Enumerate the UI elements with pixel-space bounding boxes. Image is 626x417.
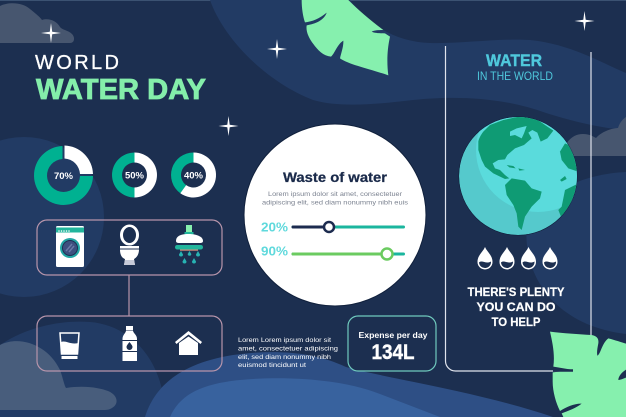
background blob: lower left bbox=[0, 322, 165, 417]
panel frame: water in the world bbox=[446, 46, 591, 371]
title line: WATER DAY: WATER DAY bbox=[36, 74, 206, 106]
cloud: top left bbox=[0, 3, 74, 43]
icon box: bottom bbox=[37, 316, 222, 371]
land: africa north bbox=[560, 144, 577, 171]
star 3 bbox=[218, 116, 238, 136]
text block: lorem ipsum bbox=[238, 337, 338, 369]
icon: house bbox=[175, 331, 202, 355]
text block: lorem ipsum: amet, consectetuer adipiscing bbox=[238, 346, 338, 352]
hudson bay bbox=[510, 126, 527, 138]
text block: lorem ipsum: euismod tincidunt ut bbox=[238, 362, 306, 369]
icons: water drops bbox=[478, 247, 558, 270]
text block: there's plenty you can do to help bbox=[468, 285, 564, 329]
title line: WORLD: WORLD bbox=[35, 52, 119, 74]
callout: expense per day: 134L bbox=[372, 341, 415, 364]
icon box: top bbox=[37, 220, 222, 275]
background wave: top band bbox=[210, 0, 626, 130]
heading: waste of water: Waste of water bbox=[283, 169, 388, 185]
slider: 20% bbox=[261, 220, 404, 234]
slider: 20%: 20% bbox=[261, 220, 288, 234]
background blob: right bbox=[526, 172, 626, 334]
text block: there's plenty you can do to help: YOU CAN DO bbox=[476, 300, 556, 314]
land: islands bbox=[507, 165, 567, 182]
background wave: bottom inner bbox=[170, 378, 440, 417]
slider: 90%: 90% bbox=[261, 244, 288, 258]
heading: water in the world bbox=[477, 51, 553, 83]
land: south america bbox=[505, 178, 542, 230]
body text: adipiscing elit, sed diam nonummy nibh euis bbox=[262, 200, 409, 206]
background blob: left circle bbox=[0, 137, 104, 297]
text block: there's plenty you can do to help: THERE'S PLENTY bbox=[468, 285, 564, 299]
panel: waste of water bbox=[244, 124, 426, 306]
leaf: top bbox=[302, 0, 390, 75]
icon: shower head bbox=[175, 225, 203, 264]
donut chart: 40% bbox=[171, 152, 216, 197]
slider: 90% bbox=[261, 244, 404, 260]
cloud: bottom left bbox=[0, 341, 117, 410]
heading: water in the world: WATER bbox=[486, 51, 542, 70]
star 1 bbox=[41, 23, 61, 43]
icon: toilet bbox=[120, 224, 140, 265]
icon: washing machine bbox=[56, 226, 84, 267]
body text bbox=[262, 191, 409, 206]
star 2 bbox=[267, 39, 287, 59]
text block: lorem ipsum: elit, sed diam nonummy nibh bbox=[238, 354, 331, 361]
globe bbox=[458, 116, 578, 236]
icon: glass of water bbox=[60, 333, 79, 359]
land: africa south bbox=[558, 184, 576, 216]
icon: water bottle bbox=[122, 326, 137, 361]
body text: Lorem ipsum dolor sit amet, consectetuer bbox=[268, 191, 403, 198]
donut chart: 70%: 70% bbox=[54, 171, 74, 182]
donut chart: 40%: 40% bbox=[184, 170, 204, 182]
donut chart: 70% bbox=[34, 146, 93, 205]
land: north america bbox=[478, 117, 553, 179]
callout: expense per day: Expense per day bbox=[358, 330, 428, 340]
title bbox=[35, 52, 206, 106]
star 4 bbox=[574, 11, 594, 31]
connector between icon boxes bbox=[128, 275, 130, 316]
donut chart: 50%: 50% bbox=[125, 170, 145, 182]
text block: there's plenty you can do to help: TO HELP bbox=[492, 315, 540, 329]
panel frame end over leaf bbox=[553, 369, 573, 372]
cloud: right bbox=[563, 117, 626, 156]
donut chart: 50% bbox=[112, 152, 157, 198]
heading: water in the world: IN THE WORLD bbox=[477, 69, 553, 83]
leaf: bottom right bbox=[550, 332, 626, 417]
text block: lorem ipsum: Lorem Lorem ipsum dolor sit bbox=[238, 337, 331, 344]
callout: expense per day bbox=[348, 316, 436, 371]
background wave: bottom outer bbox=[145, 352, 553, 417]
